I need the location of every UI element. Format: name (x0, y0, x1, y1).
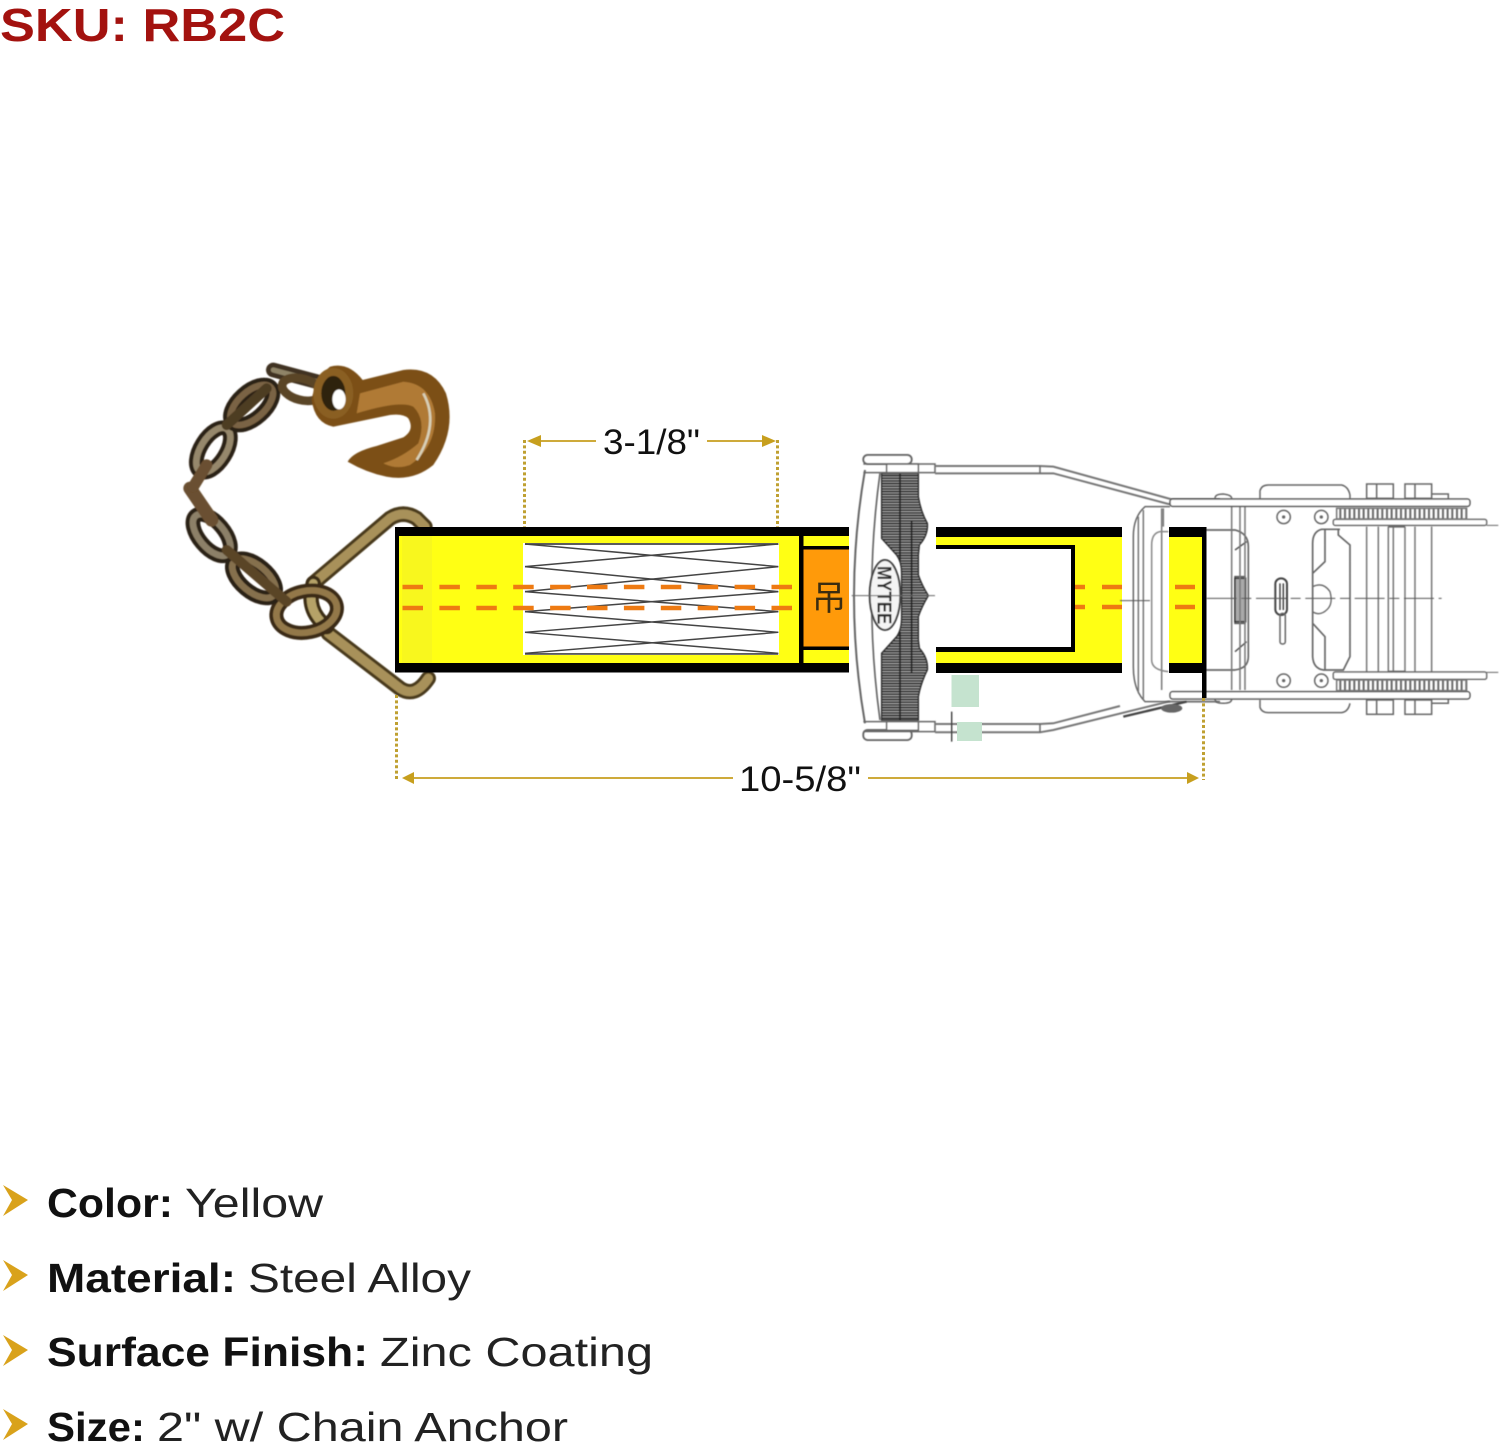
spec: color: Color: (47, 1180, 173, 1226)
black border (395, 527, 849, 672)
release slot (1275, 578, 1287, 615)
orange label (804, 536, 849, 663)
side rails (1170, 499, 1470, 506)
spec: size: Size: (47, 1404, 145, 1449)
pawl plate (1313, 529, 1350, 670)
strap left section (395, 527, 849, 672)
strap middle section (936, 527, 1122, 673)
spec: surface finish: Surface Finish: (47, 1329, 368, 1375)
spec: surface finish: Zinc Coating (380, 1329, 653, 1375)
spec: surface finish (3, 1329, 653, 1375)
dimension: 3-1/8 inch: 3-1/8" (603, 423, 700, 462)
gear bars (1367, 527, 1432, 672)
stitching dashes (402, 587, 792, 608)
frame (1133, 507, 1170, 702)
spec: color: Yellow (185, 1180, 323, 1226)
stitch window (523, 543, 779, 655)
ratchet body (1120, 484, 1498, 714)
spec: material: Material: (47, 1255, 236, 1301)
chain links (186, 370, 341, 638)
green markers (952, 675, 982, 741)
spec: size (3, 1404, 568, 1449)
ratchet handle: MYTEE (872, 566, 895, 624)
centre line (1120, 598, 1442, 601)
spec list (3, 1180, 653, 1449)
spec: color (3, 1180, 323, 1226)
spec: material: Steel Alloy (248, 1255, 472, 1301)
delta ring (311, 514, 428, 692)
yellow webbing (396, 527, 800, 672)
ratchet handle (852, 455, 1220, 742)
strap right section (1169, 527, 1206, 698)
logo badge (870, 560, 900, 630)
dimension: 3-1/8 inch (524, 423, 778, 527)
dimension: 10-5/8 inch (396, 695, 1204, 799)
mounting circles (1277, 510, 1290, 524)
title: SKU: SKU: RB2C (0, 0, 285, 51)
dimension: 10-5/8 inch: 10-5/8" (739, 760, 861, 799)
strap left section: 吊 (812, 571, 846, 620)
grab hook (312, 366, 450, 478)
spec: size: 2" w/ Chain Anchor (157, 1404, 568, 1449)
handle grip (882, 473, 928, 720)
chain anchor assembly (186, 366, 450, 692)
spec: material (3, 1255, 472, 1301)
arms (935, 466, 1220, 504)
